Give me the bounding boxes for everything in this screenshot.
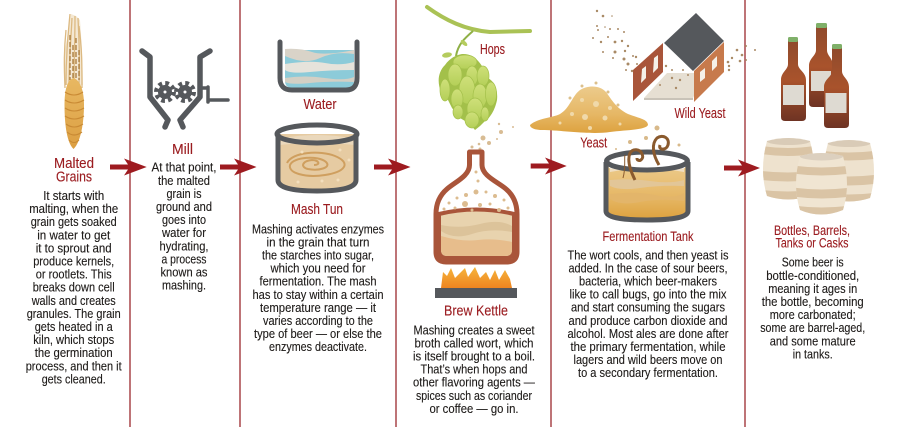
icon: wild yeast barn	[633, 13, 724, 102]
text: mash tun description	[252, 222, 384, 354]
text: brew kettle description: other flavoring agents —	[413, 376, 535, 390]
text: bottles description: bottle-conditioned,	[766, 269, 859, 283]
text: malted grains description: grain gets soaked	[31, 215, 117, 229]
text: bottles description: in tanks.	[793, 347, 833, 361]
text: malted grains description: It starts with	[43, 189, 104, 203]
arrow: grains to mill	[110, 158, 147, 176]
text: mill description: a process	[162, 252, 206, 266]
text: malted grains description: the germination	[35, 346, 113, 360]
text: fermentation description: to a secondary fermentation.	[578, 366, 718, 380]
text: mash tun description: has to stay within a certain	[252, 288, 384, 302]
heading: Hops: Hops	[480, 41, 505, 58]
text: brew kettle description: is itself brought to a boil.	[413, 350, 535, 364]
heading: Malted Grains: Malted	[54, 155, 94, 172]
text: fermentation description: like to call bugs, go into the mix	[570, 288, 727, 302]
icon: wheat ear	[64, 14, 84, 149]
text: malted grains description: malting, when the	[29, 202, 118, 216]
text: mill description: the malted	[158, 174, 210, 188]
text: brew kettle description: Mashing creates a sweet	[414, 323, 535, 337]
text: brew kettle description: spices such as coriander	[416, 389, 532, 403]
heading: Malted Grains	[54, 155, 94, 186]
text: mash tun description: fermentation. The mash	[260, 275, 376, 289]
bubbles rising from kettle	[470, 123, 514, 150]
text: bottles description: meaning it ages in	[768, 282, 857, 296]
text: bottles description: the bottle, becoming	[762, 295, 864, 309]
text: mill description: water for	[161, 226, 206, 240]
text: mash tun description: the starches into sugar,	[262, 248, 374, 262]
text: malted grains description: in water to get	[37, 228, 111, 242]
panel: bottles and barrels	[760, 23, 874, 358]
text: mash tun description: varies according to the	[263, 314, 373, 328]
panel: malted grains	[26, 14, 122, 386]
text: fermentation description: lagers and wild beers move on	[574, 353, 722, 367]
heading: Mash Tun: Mash Tun	[291, 201, 343, 218]
text: mash tun description: in the grain that turn	[266, 235, 370, 249]
text: brew kettle description: broth called wort, which	[414, 336, 534, 350]
text: fermentation description: and start consuming the sugars	[571, 301, 725, 315]
text: mash tun description: type of beer — or else the	[254, 327, 382, 341]
text: bottles description: Some beer is	[782, 256, 844, 270]
text: mill description: At that point,	[152, 161, 216, 175]
wild yeast specks	[592, 10, 756, 89]
panel: water and mash tun	[252, 42, 384, 354]
heading: Wild Yeast: Wild Yeast	[674, 105, 726, 122]
text: malted grains description: gets heated in a	[35, 320, 113, 334]
icon: bottles	[781, 23, 849, 128]
text: fermentation description	[568, 248, 728, 380]
icon: barrels	[763, 138, 874, 214]
text: mash tun description: temperature range — it	[260, 301, 376, 315]
text: mash tun description: enzymes deactivate.	[269, 340, 367, 354]
text: fermentation description: The wort cools, and then yeast is	[568, 248, 728, 262]
heading: Brew Kettle: Brew Kettle	[444, 303, 508, 320]
text: bottles description: and some mature	[770, 334, 856, 348]
text: malted grains description: process, and then it	[26, 359, 122, 373]
text: bottles description: some are barrel-aged,	[760, 321, 865, 335]
text: malted grains description: or rootlets. This	[36, 268, 112, 282]
text: malted grains description: produce kernels,	[33, 254, 114, 268]
heading: Fermentation Tank: Fermentation Tank	[602, 229, 694, 244]
text: fermentation description: alcohol. Most ales are done after	[568, 327, 728, 341]
text: malted grains description: walls and creates	[31, 294, 116, 308]
panel: mill	[142, 51, 228, 293]
text: mash tun description: which you need for	[270, 262, 366, 276]
text: malted grains description: it to sprout and	[36, 241, 112, 255]
heading: Bottles, Barrels, Tanks or Casks	[774, 223, 850, 251]
icon: hops	[427, 7, 530, 130]
text: mill description: known as	[160, 266, 208, 280]
text: mill description: goes into	[162, 213, 206, 227]
heading: Malted Grains: Grains	[56, 168, 92, 186]
icon: yeast pile	[530, 82, 648, 133]
text: mill description: ground and	[156, 200, 212, 214]
arrow: fermentation to bottles	[724, 160, 760, 176]
panel: hops and brew kettle	[413, 7, 535, 416]
text: mill description: grain is	[166, 187, 202, 201]
heading: Mill: Mill	[172, 141, 193, 158]
arrow: mill to mash tun	[220, 158, 256, 176]
text: malted grains description: gets cleaned.	[42, 372, 106, 386]
arrow: kettle to fermentation	[531, 158, 567, 174]
icon: flames and burner	[435, 267, 517, 298]
text: brew kettle description	[413, 323, 535, 416]
heading: Yeast: Yeast	[580, 135, 608, 152]
text: bottles description	[760, 256, 865, 361]
icon: mill machine	[142, 51, 228, 127]
heading: Water: Water	[304, 96, 336, 113]
text: fermentation description: the primary fermentation, while	[570, 340, 726, 354]
text: brew kettle description: That’s when hops and	[420, 363, 528, 377]
icon: water vessel	[280, 42, 357, 90]
text: fermentation description: bacteria, which beer-makers	[579, 274, 717, 288]
text: malted grains description: kiln, which stops	[33, 333, 114, 347]
text: mash tun description: Mashing activates enzymes	[252, 222, 384, 236]
text: mill description: mashing.	[162, 279, 206, 293]
text: fermentation description: and produce carbon dioxide and	[568, 314, 728, 328]
text: malted grains description	[26, 189, 122, 386]
text: brew kettle description: or coffee — go in.	[430, 402, 518, 416]
text: mill description	[152, 161, 216, 293]
text: mill description: hydrating,	[160, 239, 208, 253]
column dividers	[130, 0, 745, 427]
text: fermentation description: added. In the case of sour beers,	[568, 261, 728, 275]
icon: mash tun	[277, 125, 357, 191]
text: malted grains description: granules. The grain	[27, 307, 121, 321]
heading: Bottles, Barrels, Tanks or Casks: Bottles, Barrels,	[774, 223, 850, 238]
arrow: mash tun to kettle	[374, 158, 410, 176]
icon: fermentation tank	[606, 126, 688, 220]
icon: brew kettle	[436, 152, 517, 262]
text: bottles description: more carbonated;	[770, 308, 856, 322]
heading: Bottles, Barrels, Tanks or Casks: Tanks or Casks	[776, 236, 849, 251]
panel: yeast and fermentation tank	[530, 10, 756, 380]
text: malted grains description: breaks down cell	[33, 281, 115, 295]
